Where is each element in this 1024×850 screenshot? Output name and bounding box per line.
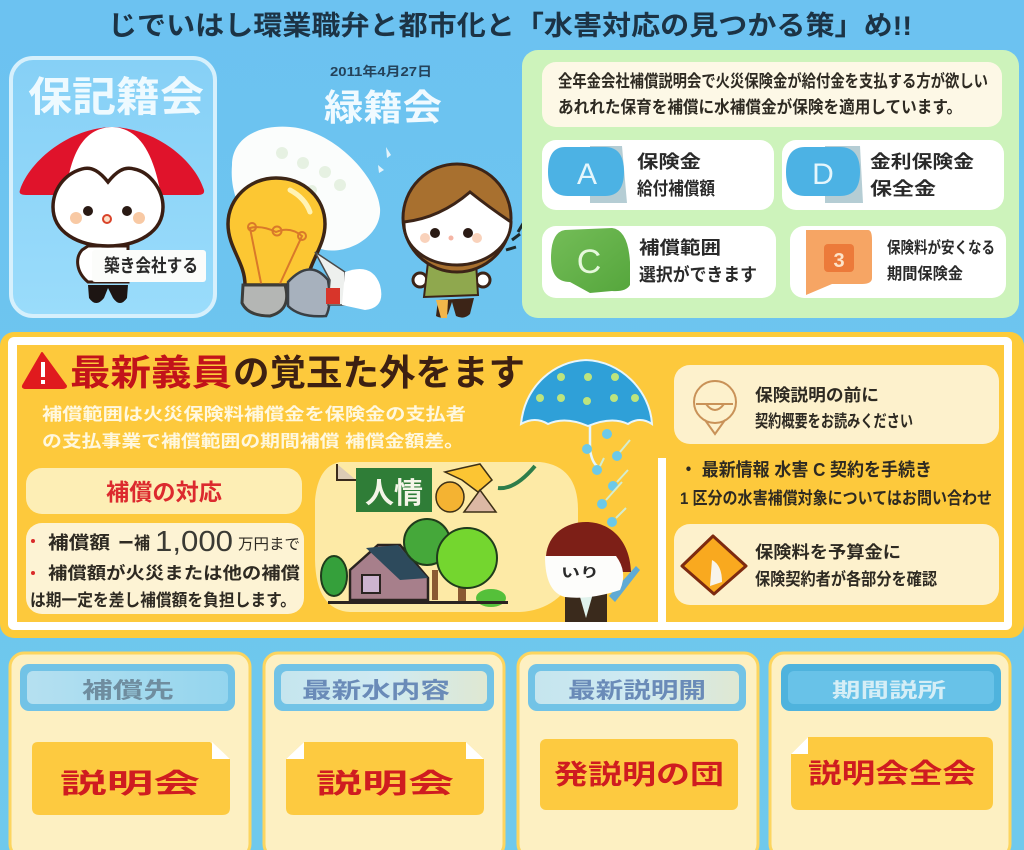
text block: note: 1 区分の水害補償対象についてはお問い合わせ [680,488,992,508]
card: bottom 3: 最新説明開 [568,678,706,703]
card C: 補償範囲 [639,237,721,258]
card D: D [812,158,834,191]
title: じでいはし環業職弁と都市化と「水害対応の見つかる策」め!! [108,11,912,41]
card A: 保険金 [637,152,701,172]
card: bulb advice [674,365,999,444]
card: bottom 1: 補償先 [82,678,174,703]
illustration: house and trees: 人情 [365,477,423,510]
illustration: house and trees [315,462,578,612]
card A: 給付補償額 [637,179,715,199]
card: bottom 2 [264,653,504,850]
panel: green options [522,50,1019,318]
subtitle: centre group: 緑籍会 [324,87,442,128]
illustration: person in suit [545,522,640,622]
card 3 [790,226,1006,298]
text block: intro [542,62,1002,127]
card: bottom 1 [10,653,250,850]
icon: red umbrella mascot [20,127,204,303]
text block: note [680,459,992,508]
heading: warning: の覚玉た外をます [233,352,525,393]
text block: intro: あれれた保育を補償に水補償金が保険を適用しています。 [558,97,962,117]
panel heading: 保記籍会 [28,74,204,120]
card A [542,140,774,210]
card 3: 期間保険金 [887,264,963,283]
text block: white description: 補償範囲は火災保険料補償金を保険金の支払者 [42,404,466,424]
card: warning sign advice: 保険料を予算金に [755,542,901,562]
card: warning sign advice: 保険契約者が各部分を確認 [755,569,937,589]
card: bulb advice: 契約概要をお読みください [755,412,913,431]
card: bottom 3: 発説明の団 [554,760,724,790]
card: bulb advice: 保険説明の前に [755,386,879,405]
card: bottom 2: 最新水内容 [302,678,450,703]
panel: mascot under umbrella [11,58,215,316]
icon: warning triangle [23,353,66,388]
text block: conditions: ー補 [118,534,150,553]
text block: white description [42,404,466,451]
card: bottom 4 [770,653,1010,850]
subtitle: centre group [324,64,442,128]
card C [542,226,776,298]
text block: conditions [26,523,304,614]
sign: mascot placard: 築き会社する [104,255,198,276]
text block: conditions: 1,000 [155,526,233,558]
illustration: person in suit: いり [561,565,599,580]
illustration: light bulb with helmet [228,127,391,316]
label: conditions heading [26,468,302,514]
sign: mascot placard [92,250,206,282]
card: bottom 3 [518,653,758,850]
card: warning sign advice [674,524,999,605]
card D [782,140,1004,210]
card: bottom 4: 期間説所 [832,679,946,702]
icon: blue umbrella with rain [521,360,652,527]
illustration: brown-haired child [403,164,524,318]
text block: conditions: 万円まで [238,536,300,553]
card C: 選択ができます [639,264,757,285]
card A: A [577,158,597,191]
heading: warning [70,352,525,393]
text block: conditions: は期一定を差し補償額を負担します。 [30,591,296,610]
heading: warning: 最新義員 [70,352,232,393]
subtitle: centre group: 2011年4月27日 [330,64,432,79]
card D: 保全金 [870,179,936,199]
card 3: 保険料が安くなる [887,238,995,257]
label: conditions heading: 補償の対応 [106,479,222,505]
card: bottom 2: 説明会 [316,769,454,799]
panel: warning section [0,332,1024,638]
card D: 金利保険金 [870,152,974,172]
card C: C [577,243,601,281]
text block: conditions: 補償額 [48,533,110,553]
text block: white description: の支払事業で補償範囲の期間補償 補償金額差。 [42,431,464,451]
card: bottom 1: 説明会 [60,769,200,799]
divider [658,458,666,622]
text block: conditions: 補償額が火災または他の補償 [48,563,300,583]
text block: note: ・ 最新情報 水害 C 契約を手続き [680,459,932,480]
card 3: 3 [833,250,845,272]
card: bottom 4: 説明会全会 [808,759,976,789]
